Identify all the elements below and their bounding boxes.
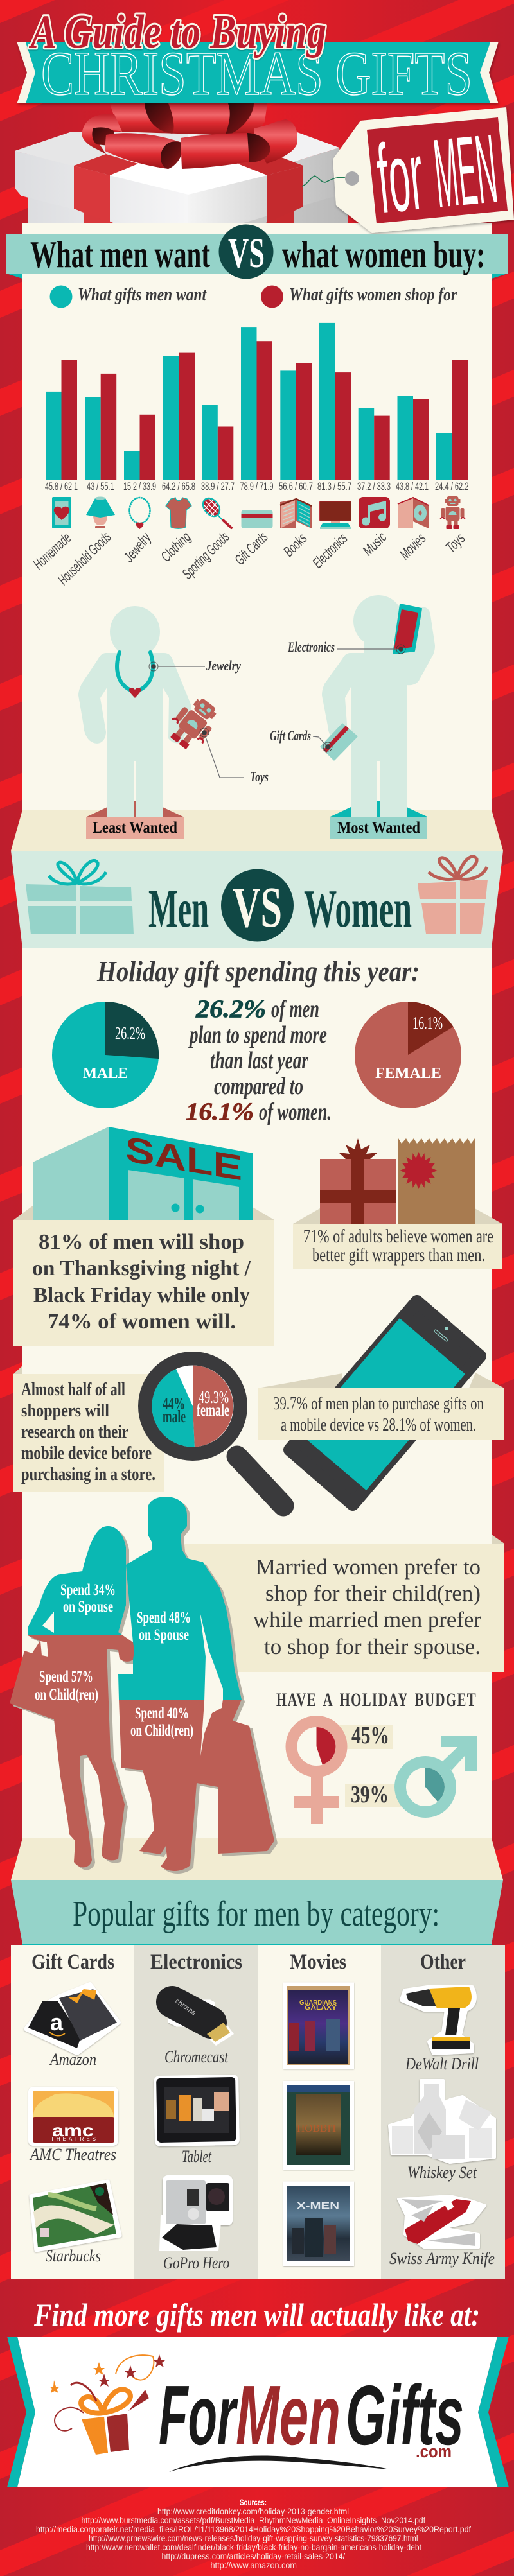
bar value labels: 78.9 / 71.9 [240,480,274,492]
bar value labels [45,480,469,492]
product captions: Starbucks [46,2247,101,2265]
rotated category labels: Household Goods [55,528,114,588]
stat box: married shoppers: to shop for their spouse. [264,1634,481,1659]
rotated category labels: Books [280,530,310,560]
figure: least wanted man [78,606,191,817]
column headings: Other [420,1951,466,1974]
silhouette labels: on Spouse [139,1626,189,1644]
column headings: Gift Cards [31,1951,114,1974]
heading band: popular gifts [11,1880,503,1945]
stat box: 81% of men: on Thanksgiving night / [32,1257,251,1280]
bar chart [46,323,468,480]
icon: male symbol [400,1736,477,1812]
icon: robot [439,496,465,529]
product captions: Whiskey Set [407,2163,477,2182]
pie: male: 26.2% [115,1023,145,1043]
bar value labels: 43.8 / 42.1 [396,480,429,492]
stat box: married shoppers [184,1535,504,1672]
product captions: Swiss Army Knife [389,2249,495,2268]
product: x-men poster: X-MEN [297,2200,339,2211]
label box: most wanted: Most Wanted [337,819,420,837]
rotated category labels: Jewelry [120,529,154,566]
icon: electronics monitor [320,501,351,529]
bar value labels: 38.9 / 27.7 [201,480,235,492]
icon: sale store [13,1127,274,1220]
icon: magnifying glass pie: 44% [163,1394,185,1413]
icon: wrapped gifts [293,1138,502,1224]
logo wordmark [159,2368,464,2462]
product: guardians poster: GUARDIANS [299,1999,337,2006]
icon: book [280,499,312,528]
logo wordmark: For [159,2368,238,2462]
cream main panel [22,223,492,1951]
product: amazon gift card: a [50,2009,64,2035]
stat box: 81% of men: 74% of women will. [48,1310,236,1334]
callout: toys [200,728,269,785]
legend: What gifts men want [78,284,207,305]
silhouette labels: on Spouse [63,1598,113,1615]
sources [36,2497,471,2570]
podium band lower [11,1838,503,1880]
bar value labels: 15.2 / 33.9 [123,480,156,492]
product: x-men poster [283,2182,354,2266]
icon: movie case [398,498,429,528]
rotated category labels: Sporting Goods [179,528,233,582]
rotated category labels: Music [359,528,390,559]
sources: http://media.corporateir.net/media_files/IROL/11/113968/2014Holiday%20Shopping%20Behavior%20Survey%20Report.pdf [36,2524,471,2534]
product: dewalt drill [402,1987,475,2053]
callout: gift cards: Gift Cards [270,727,311,744]
stat box: married shoppers: while married men prefer [253,1607,481,1632]
label: 39%: 39% [351,1781,389,1808]
product: swiss army knife [398,2196,485,2247]
bar value labels: 45.8 / 62.1 [45,480,78,492]
legend [50,284,457,308]
rotated category labels: Homemade [30,530,74,572]
product: guardians poster [283,1983,354,2069]
product captions: Amazon [49,2050,96,2069]
callout: jewelry [149,657,241,674]
icon: music [359,497,390,528]
stat: spending comparison: 16.1% [186,1098,254,1126]
label box: least wanted: Least Wanted [93,819,177,837]
pie: male [52,1002,159,1108]
gift tag: for MEN: for [373,121,428,234]
stat box: almost half of shoppers [13,1366,164,1492]
product: guardians poster: GALAXY [305,2005,337,2012]
text: Women: Women [304,879,412,939]
stat: spending comparison [186,995,332,1126]
column headings: Electronics [150,1951,242,1974]
gift box illustration [15,103,348,239]
icon: magnifying glass pie: female [197,1400,229,1420]
rotated category labels: Electronics [309,530,351,571]
couple silhouette [10,1497,278,1874]
silhouette labels: Spend 57% [39,1668,93,1685]
bar value labels: 81.3 / 55.7 [317,480,351,492]
stat box: mobile purchase [258,1388,504,1440]
silhouette labels [35,1581,193,1739]
column headings: Movies [290,1951,346,1974]
stat box: almost half of shoppers: mobile device before [21,1443,152,1463]
bar value labels: 24.4 / 62.2 [435,480,469,492]
sources: http://dupress.com/articles/holiday-retail-sales-2014/ [162,2551,345,2561]
silhouette labels: Spend 40% [135,1705,189,1722]
callout: gift cards [270,727,332,751]
icon: gift card [242,510,272,528]
text: Men: Men [148,879,209,939]
callout: electronics [287,639,405,655]
product: AMC card: amc [52,2121,94,2140]
product: AMC card: THEATRES [51,2136,96,2142]
product captions: Tablet [182,2147,212,2166]
heading band: What men want VS what women buy: VS [228,230,265,277]
title: A Guide to Buying: A Guide to Buying [29,6,326,58]
product: amazon gift card [26,1984,119,2053]
product: chromecast: chrome [173,1997,197,2017]
product: AMC card [28,2087,118,2146]
stat: spending comparison: plan to spend more [188,1022,327,1049]
gift card in hand [321,724,357,760]
stat: spending comparison: of women. [259,1099,332,1126]
sources: http://www.amazon.com [211,2560,297,2570]
stat box: married shoppers: Married women prefer to [256,1554,481,1580]
product: gopro [159,2175,233,2251]
callout: electronics: Electronics [287,639,335,655]
figure: most wanted man [322,595,435,817]
icon: teal gift [26,860,134,934]
silhouette labels: on Child(ren) [130,1722,193,1739]
product captions [29,2048,495,2272]
product: whiskey set [389,2080,495,2163]
icon: magnifying glass pie [138,1352,283,1506]
icon: female symbol [292,1721,342,1824]
bar value labels: 37.2 / 33.3 [357,480,391,492]
stat: spending comparison: of men [271,996,319,1023]
gift tag: for MEN [302,107,514,234]
sources: Sources: [240,2497,267,2507]
stat: spending comparison: compared to [214,1073,303,1100]
logo swoosh [169,2455,390,2472]
product captions: DeWalt Drill [405,2055,479,2073]
icon: smartphone [258,1301,504,1504]
VS badge [221,869,294,941]
sources: http://www.burstmedia.com/assets/pdf/BurstMedia_RhythmNewMedia_OnlineInsights_Nov2014.pdf [81,2515,425,2525]
pie: female [355,1002,461,1108]
callout: toys: Toys [250,769,269,785]
product captions: Chromecast [164,2048,229,2066]
legend: What gifts women shop for [289,284,457,305]
rotated category labels: Movies [396,530,429,562]
pie: female: FEMALE [375,1065,441,1082]
callout: jewelry: Jewelry [206,657,241,674]
rotated category labels: Clothing [157,528,194,565]
logo banner: ForMenGifts [7,2337,509,2487]
stat box: almost half of shoppers: research on their [21,1422,128,1442]
pie: male: MALE [83,1065,128,1082]
product: hobbit poster [283,2081,354,2170]
rotated category labels [30,528,468,588]
sources: http://www.creditdonkey.com/holiday-2013-gender.html [157,2506,349,2516]
product: starbucks card [31,2181,120,2250]
rotated category labels: Gift Cards [231,528,271,568]
phone held by figure [393,604,421,654]
product: kindle tablet [154,2075,240,2146]
product captions: AMC Theatres [29,2145,116,2164]
stat: spending comparison: than last year [210,1047,309,1074]
stat box: married shoppers: shop for their child(ren) [265,1581,481,1606]
icon: magnifying glass pie: male [163,1407,186,1426]
product: hobbit poster: HOBBIT [297,2122,338,2134]
product: chromecast [172,1997,234,2046]
stat box: almost half of shoppers: shoppers will [21,1400,109,1421]
stat box: 81% of men: Black Friday while only [33,1284,250,1307]
icon: shirt [166,498,191,528]
logo gift icon [49,2354,165,2455]
stat box: gift wrappers [293,1224,502,1269]
icon: homemade heart card [52,497,71,528]
stat box: almost half of shoppers: Almost half of all [21,1379,125,1400]
label: 45% [337,1722,393,1749]
panel: gift categories [11,1945,505,2279]
heading: holiday gift spending: Holiday gift spending this year: [96,955,420,988]
podium band [11,810,503,851]
icon: lamp [86,497,115,528]
bar value labels: 64.2 / 65.8 [162,480,195,492]
icon: tennis racket [200,495,231,528]
stat box: almost half of shoppers: purchasing in a store. [21,1464,155,1484]
VS badge: VS [233,876,282,939]
icon: necklace [130,498,150,529]
sources: http://www.nerdwallet.com/dealfinder/black-friday/black-friday-no-bargain-americans-holiday-debt [86,2542,421,2552]
icon: sale store: SALE [125,1129,242,1188]
silhouette labels: Spend 48% [137,1609,191,1626]
stat box: 81% of men: 81% of men will shop [39,1230,244,1254]
icon: magnifying glass pie: 49.3% [199,1388,229,1407]
toy robot held in hand [163,691,225,756]
heading band: What men want VS what women buy: What men want [30,233,210,275]
stat: spending comparison: 26.2% [195,995,266,1023]
product captions: GoPro Hero [163,2254,229,2272]
icon: pink gift [418,857,488,934]
column headings [31,1951,466,1974]
silhouette labels: on Child(ren) [35,1686,98,1703]
bar value labels: 56.6 / 60.7 [279,480,313,492]
sources: http://www.prnewswire.com/news-releases/holiday-gift-wrapping-survey-statistics-79837697.html [89,2533,418,2543]
pie: female: 16.1% [412,1013,443,1032]
heading band: What men want VS what women buy [6,225,508,279]
silhouette labels: Spend 34% [60,1581,116,1599]
label: 45%: 45% [351,1722,389,1749]
bar value labels: 43 / 55.1 [87,480,114,492]
rotated category labels: Toys [442,530,468,555]
logo .com: .com [416,2442,452,2461]
logo wordmark: Men [236,2368,341,2462]
stat box: 81% of men [13,1220,274,1346]
section band: Men VS Women [11,851,503,948]
